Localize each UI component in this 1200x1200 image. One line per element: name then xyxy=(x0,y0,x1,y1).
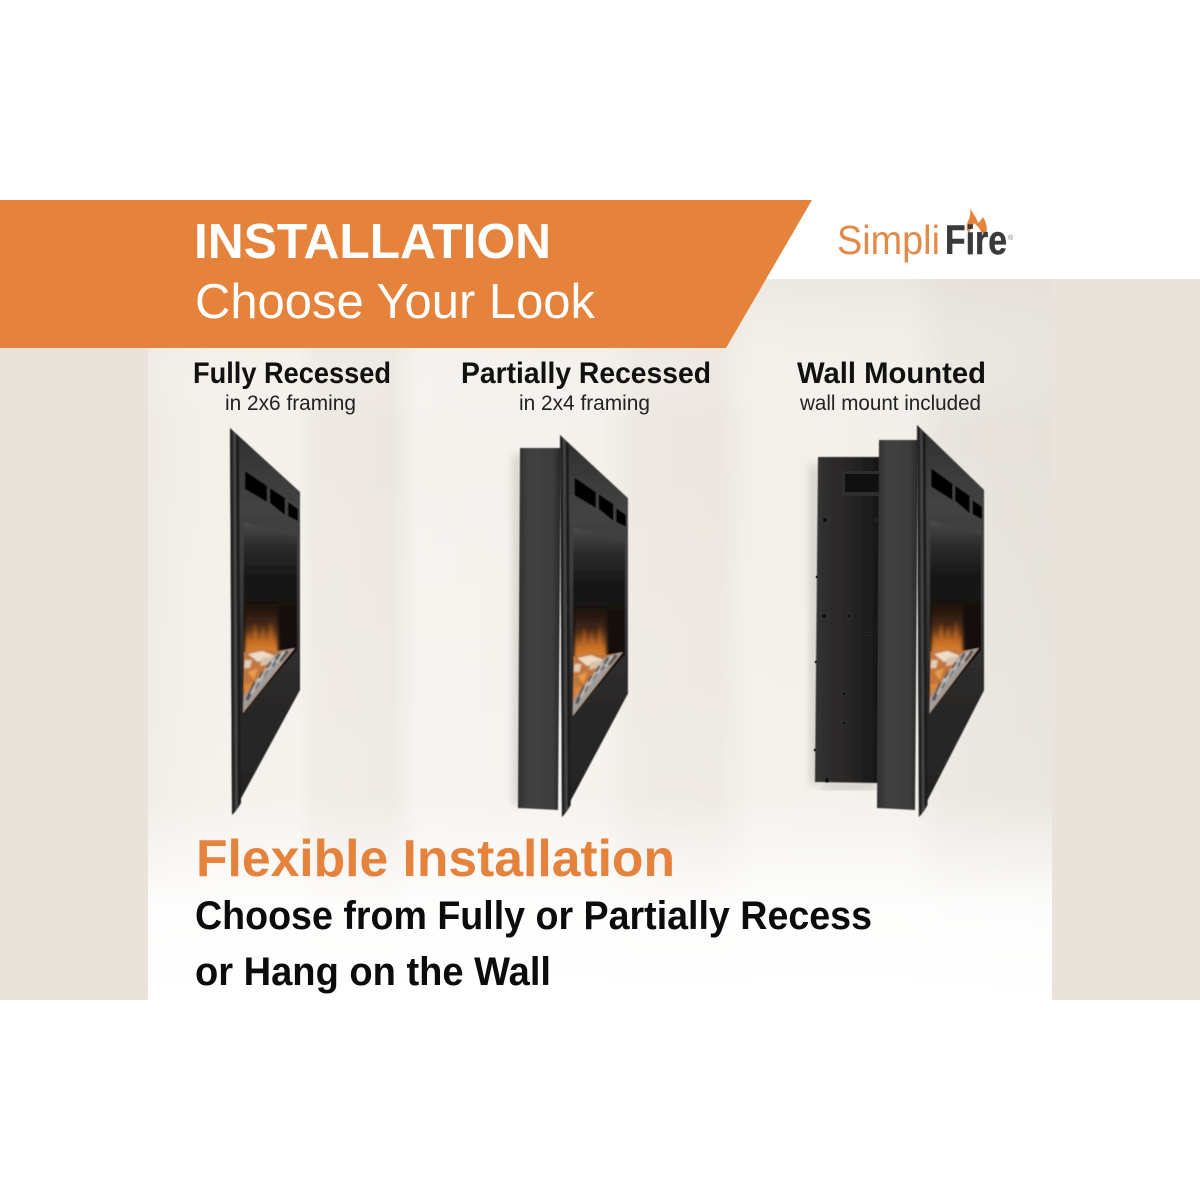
registered mark: ® xyxy=(1008,234,1014,242)
subtitle: choose your look: Choose Your Look xyxy=(195,275,595,329)
logo wordmark fire: Fire xyxy=(945,217,1007,263)
rear vent xyxy=(842,471,880,496)
mounting bolts xyxy=(814,518,878,782)
orange title banner xyxy=(0,200,812,348)
rear housing xyxy=(815,457,880,783)
heading: flexible installation: Flexible Installation xyxy=(196,830,675,888)
wall photo background xyxy=(148,279,1052,1000)
title: installation: INSTALLATION xyxy=(194,215,551,269)
option heading: fully recessed xyxy=(193,357,391,415)
recessed box side xyxy=(518,448,561,810)
option heading: fully recessed: in 2x6 framing xyxy=(225,392,356,415)
option heading: partially recessed xyxy=(461,357,711,415)
fireplace: fully recessed xyxy=(230,428,300,815)
body text: or Hang on the Wall xyxy=(195,950,551,994)
fireplace: wall mounted xyxy=(810,425,984,817)
option heading: wall mounted xyxy=(797,357,986,415)
infographic canvas xyxy=(0,200,1200,1000)
logo header strip xyxy=(700,200,1200,279)
option heading: wall mounted: wall mount included xyxy=(799,392,981,415)
SimpliFire logo xyxy=(837,208,1014,263)
option heading: partially recessed: in 2x4 framing xyxy=(519,392,650,415)
option heading: partially recessed: Partially Recessed xyxy=(461,357,711,390)
logo wordmark simpli: Simpli xyxy=(837,217,940,263)
option heading: fully recessed: Fully Recessed xyxy=(193,357,391,390)
option heading: wall mounted: Wall Mounted xyxy=(797,357,986,390)
body text: Choose from Fully or Partially Recess xyxy=(195,894,872,938)
body text xyxy=(195,894,872,994)
fireplace: partially recessed xyxy=(513,435,628,817)
side background bands xyxy=(0,200,1200,1000)
wall mount flange xyxy=(877,440,918,810)
icon: flame xyxy=(967,208,987,233)
